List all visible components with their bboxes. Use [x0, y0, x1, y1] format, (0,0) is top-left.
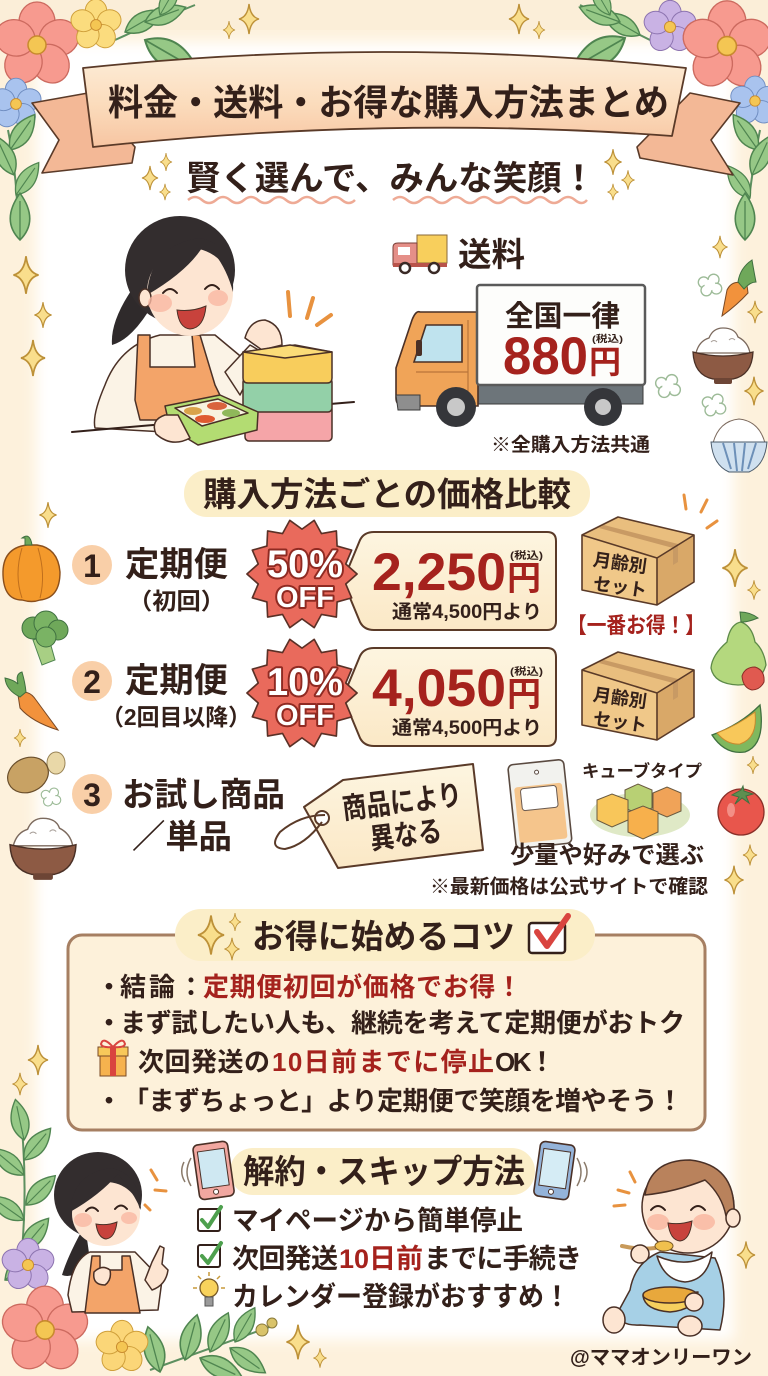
subtitle	[142, 149, 634, 203]
tip 4: ・	[96, 1086, 122, 1116]
number badge	[72, 661, 112, 701]
icon: tomato	[718, 786, 764, 835]
plan name: 定期便	[125, 546, 228, 584]
title ribbon	[32, 52, 740, 175]
small amounts caption: 少量や好みで選ぶ	[510, 842, 704, 869]
number badge	[72, 545, 112, 585]
heading: tips	[175, 909, 595, 961]
cube type label: キューブタイプ	[582, 761, 702, 781]
box: monthly set: 月齢別	[592, 550, 648, 577]
price tag: 通常4,500円より	[392, 717, 542, 739]
icon: melon slice	[712, 705, 761, 752]
number badge: 3	[83, 777, 101, 813]
side decorations right top	[693, 236, 767, 472]
icon: strawberry	[742, 667, 764, 690]
price tag: 通常4,500円より	[392, 601, 542, 623]
tip 2: ・	[96, 1008, 122, 1038]
discount burst: OFF	[276, 582, 334, 614]
price note: ※最新価格は公式サイトで確認	[430, 876, 708, 898]
box: monthly set	[582, 652, 694, 740]
top sparkles	[223, 4, 545, 39]
icon: carrot left	[5, 672, 58, 730]
discount burst	[247, 639, 357, 747]
shipping price: (税込)	[592, 333, 623, 345]
icon: rice bowl blue	[711, 419, 767, 472]
tip 1: 結論	[120, 972, 175, 1002]
price tag: 4,050	[372, 659, 506, 718]
plan name: 定期便	[125, 662, 228, 700]
side decorations left middle	[2, 536, 76, 880]
icon: rice bowl left	[10, 818, 76, 880]
illustration: mother pointing	[54, 1152, 168, 1313]
row 1	[72, 495, 717, 638]
number badge: 1	[83, 548, 101, 584]
plan name	[122, 776, 285, 855]
best value label: 【一番お得！】	[567, 613, 705, 638]
flat rate text: 全国一律	[505, 300, 620, 333]
title: 料金・送料・お得な購入方法まとめ	[108, 82, 669, 123]
price tag: 2,250	[372, 543, 506, 602]
icon: gift	[98, 1041, 128, 1076]
icon: small truck	[393, 235, 447, 273]
subtitle: 賢く選んで、みんな笑顔！	[186, 160, 596, 198]
illustration: mother with food containers	[72, 216, 354, 445]
panel: tips	[68, 909, 705, 1130]
box: monthly set	[582, 517, 694, 605]
shipping heading: 送料	[458, 236, 525, 273]
discount burst: 10%	[267, 661, 343, 704]
top right flowers	[566, 0, 768, 127]
tip 4: 「まずちょっと」より定期便で笑顔を増やそう！	[123, 1086, 683, 1116]
row 3	[72, 759, 708, 898]
cubes	[590, 784, 690, 839]
box: monthly set: セット	[592, 709, 648, 736]
icon: pumpkin pepper	[3, 536, 60, 602]
row 2	[72, 639, 694, 747]
heading: price comparison: 購入方法ごとの価格比較	[203, 477, 571, 514]
shipping note: ※全購入方法共通	[491, 433, 650, 456]
icon: light bulb and item 3	[193, 1272, 570, 1312]
price tag: 円	[507, 676, 541, 714]
price tag	[343, 532, 556, 630]
check item 1: マイページから簡単停止	[232, 1206, 523, 1236]
tip 1: 定期便初回が価格でお得！	[203, 972, 522, 1002]
price tag: (税込)	[510, 665, 543, 678]
side decorations right middle	[711, 549, 766, 894]
hang tag: 異なる	[368, 816, 444, 856]
heading: tips: お得に始めるコツ	[252, 918, 515, 955]
icon: sparkle	[14, 729, 26, 747]
plan name: （2回目以降）	[101, 704, 251, 730]
tip 2: まず試したい人も、継続を考えて定期便がおトク	[120, 1008, 685, 1038]
plan name: ／単品	[132, 818, 232, 855]
icon: pear	[711, 612, 766, 685]
tip 3: OK！	[495, 1047, 555, 1077]
left sparkles lower	[12, 1045, 48, 1095]
hang tag	[275, 764, 483, 868]
number badge	[72, 774, 112, 814]
icon: light bulb and item 3: カレンダー登録がおすすめ！	[232, 1281, 570, 1312]
hang tag: 商品により	[340, 779, 464, 826]
plan name: （初回）	[128, 588, 225, 614]
icon: pink phone	[192, 1141, 235, 1200]
plan name	[101, 662, 251, 730]
icon: potato	[2, 751, 65, 799]
discount burst: OFF	[276, 700, 334, 732]
checklist	[193, 1206, 582, 1312]
bottom left flowers	[0, 1098, 326, 1376]
price tag: 円	[507, 560, 541, 598]
plan name	[125, 546, 228, 614]
tip 3: 次回発送の	[138, 1047, 270, 1077]
icon: rice bowl	[693, 328, 753, 384]
right vine	[721, 109, 768, 240]
discount burst: 50%	[267, 543, 343, 586]
heading: cancel and skip	[182, 1141, 587, 1200]
icon: carrot	[722, 260, 756, 316]
icon: blue phone	[533, 1141, 576, 1200]
icon: broccoli	[22, 611, 68, 665]
tip 3	[98, 1041, 555, 1077]
box: monthly set: セット	[592, 574, 648, 601]
tip 3: 10日前までに停止	[272, 1047, 494, 1077]
tip 1: ・	[96, 972, 122, 1002]
shipping price: 880	[503, 327, 588, 386]
box: monthly set: 月齢別	[592, 685, 648, 712]
illustration: baby eating	[603, 1160, 755, 1336]
price tag: (税込)	[510, 549, 543, 562]
illustration: delivery truck	[396, 285, 680, 427]
shipping heading	[393, 235, 525, 273]
check item 2	[198, 1243, 582, 1274]
tip 1: ：	[178, 972, 204, 1002]
credit: @ママオンリーワン	[570, 1347, 752, 1369]
side sparkles left	[14, 256, 56, 528]
plan name: お試し商品	[122, 776, 285, 813]
check item 2: までに手続き	[424, 1244, 582, 1274]
discount burst	[247, 520, 357, 628]
check item 2: 10日前	[339, 1244, 423, 1274]
left vine	[0, 109, 45, 240]
pouch	[508, 759, 572, 849]
top left flowers	[0, 0, 204, 131]
shipping price: 円	[589, 344, 621, 380]
heading: cancel and skip: 解約・スキップ方法	[243, 1153, 525, 1190]
price tag	[343, 648, 556, 746]
number badge: 2	[83, 664, 101, 700]
check item 2: 次回発送	[232, 1244, 338, 1274]
